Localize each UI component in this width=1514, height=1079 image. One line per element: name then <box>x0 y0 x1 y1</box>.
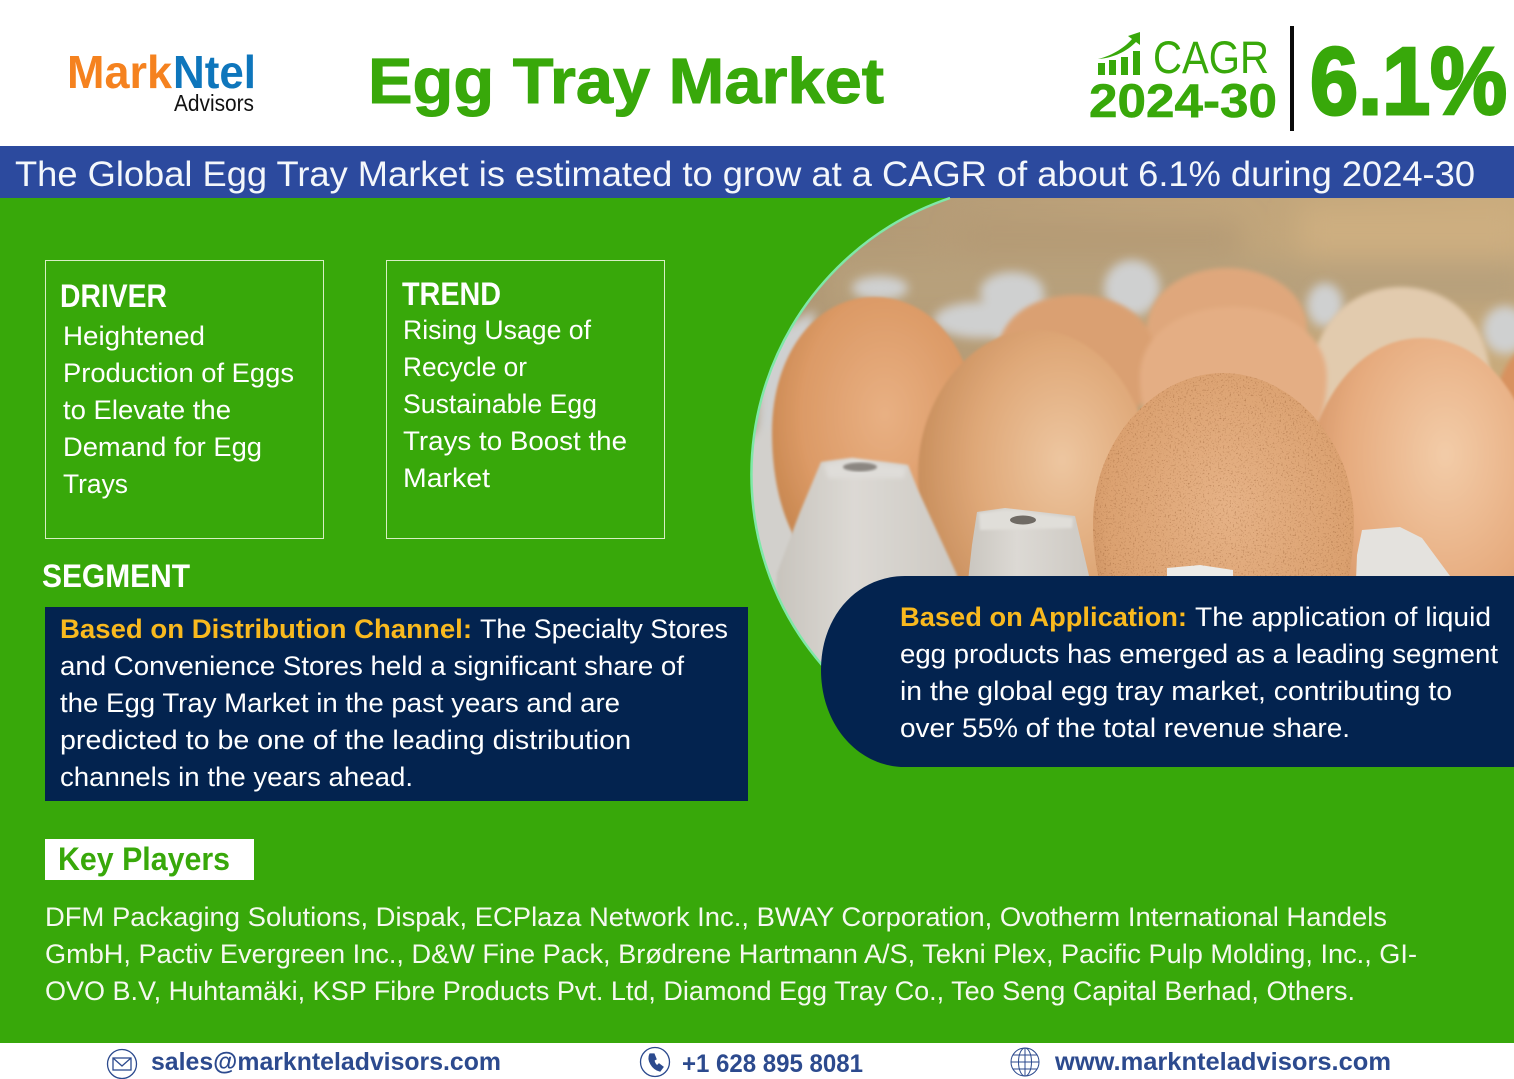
panel: distribution channel segment: and Convenience Stores held a significant share of <box>60 651 685 681</box>
tray cones <box>776 456 958 650</box>
title: Egg Tray Market <box>368 45 884 117</box>
icon: phone <box>640 1048 670 1076</box>
trend text <box>403 315 627 493</box>
panel: application segment <box>821 576 1514 767</box>
logo: MarkNtel Advisors: Mark <box>67 46 172 98</box>
phone number: +1 628 895 8081 <box>682 1050 863 1078</box>
CAGR label: CAGR <box>1153 32 1269 83</box>
panel: distribution channel segment: Based on Distribution Channel: <box>60 614 472 644</box>
trend text: Trays to Boost the <box>403 426 627 456</box>
trend heading: TREND <box>402 276 501 312</box>
driver text <box>63 321 294 499</box>
icon: email <box>108 1050 136 1078</box>
panel: application segment: in the global egg tray market, contributing to <box>900 676 1452 706</box>
key players list: GmbH, Pactiv Evergreen Inc., D&W Fine Pack, Brødrene Hartmann A/S, Tekni Plex, Pacific Pulp Molding, Inc., GI- <box>45 939 1417 969</box>
driver text: Production of Eggs <box>63 358 294 388</box>
back eggs <box>998 266 1514 422</box>
back tray blurred <box>755 254 1514 438</box>
panel: distribution channel segment: The Specialty Stores <box>480 614 728 644</box>
panel: application segment: Based on Application: <box>900 602 1187 632</box>
segment heading: SEGMENT <box>42 558 190 594</box>
panel: trend <box>386 260 664 538</box>
trend text: Market <box>403 463 491 493</box>
website address: www.marknteladvisors.com <box>1054 1048 1391 1076</box>
summary banner <box>0 146 1514 198</box>
driver text: Demand for Egg <box>63 432 262 462</box>
key players list: OVO B.V, Huhtamäki, KSP Fibre Products Pvt. Ltd, Diamond Egg Tray Co., Teo Seng Capital Berhad, Others. <box>45 976 1355 1006</box>
driver heading: DRIVER <box>60 278 167 314</box>
panel: application segment: egg products has emerged as a leading segment <box>900 639 1498 669</box>
driver text: Trays <box>63 469 128 499</box>
trend text: Sustainable Egg <box>403 389 597 419</box>
left egg <box>770 296 964 534</box>
logo: MarkNtel Advisors <box>67 46 256 116</box>
email address: sales@marknteladvisors.com <box>151 1048 501 1076</box>
footer <box>0 1043 1514 1079</box>
CAGR badge <box>1089 26 1507 135</box>
panel: distribution channel segment <box>45 607 748 801</box>
green main panel <box>0 198 1514 1043</box>
panel: application segment: over 55% of the total revenue share. <box>900 713 1350 743</box>
panel: distribution channel segment: the Egg Tray Market in the past years and are <box>60 688 620 718</box>
header background <box>0 0 1514 146</box>
panel: distribution channel segment: predicted to be one of the leading distribution <box>60 725 631 755</box>
logo: MarkNtel Advisors: Advisors <box>174 90 254 116</box>
summary banner: The Global Egg Tray Market is estimated to grow at a CAGR of about 6.1% during 2024-30 <box>15 155 1475 194</box>
trend text: Recycle or <box>403 352 527 382</box>
CAGR period: 2024-30 <box>1089 74 1277 127</box>
driver text: Heightened <box>63 321 205 351</box>
tray base <box>752 428 793 592</box>
panel: distribution channel segment: channels in the years ahead. <box>60 762 413 792</box>
icon: globe <box>1011 1048 1039 1076</box>
trend text: Rising Usage of <box>403 315 591 345</box>
driver text: to Elevate the <box>63 395 231 425</box>
photo: eggs in a tray <box>740 198 1514 690</box>
key players list <box>45 902 1417 1006</box>
right egg <box>1303 338 1514 680</box>
second egg <box>918 330 1150 640</box>
logo: MarkNtel Advisors: Ntel <box>173 46 256 98</box>
key players list: DFM Packaging Solutions, Dispak, ECPlaza Network Inc., BWAY Corporation, Ovotherm International Handels <box>45 902 1387 932</box>
front egg <box>1093 373 1354 576</box>
key players label: Key Players <box>58 841 230 877</box>
panel: driver <box>46 260 324 538</box>
icon: rising bars with arrow <box>1098 32 1140 75</box>
panel: application segment: The application of liquid <box>1195 602 1491 632</box>
divider <box>1290 26 1294 131</box>
